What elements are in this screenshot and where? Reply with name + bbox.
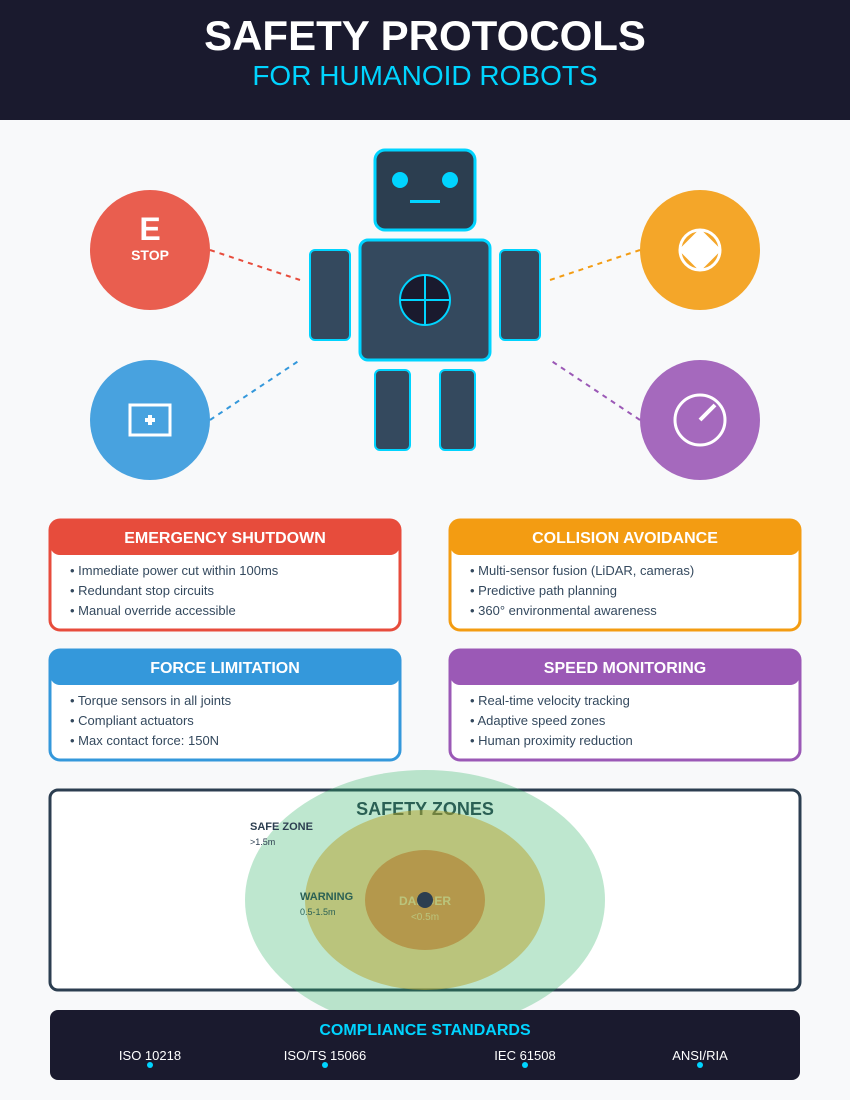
panel: force limitation: • Torque sensors in all joints bbox=[70, 693, 232, 708]
panel: force limitation: • Compliant actuators bbox=[70, 713, 194, 728]
label: warning: 0.5-1.5m bbox=[300, 907, 336, 917]
standard: ISO/TS 15066: ISO/TS 15066 bbox=[284, 1048, 366, 1063]
panel: speed monitoring: SPEED MONITORING bbox=[544, 660, 706, 677]
panel: safety zones bbox=[50, 770, 800, 1030]
icon: emergency stop bbox=[90, 190, 210, 310]
standard: IEC 61508: IEC 61508 bbox=[494, 1048, 556, 1063]
panel: force limitation bbox=[50, 650, 400, 760]
panel: speed monitoring: • Real-time velocity tracking bbox=[470, 693, 630, 708]
label: safe zone: SAFE ZONE bbox=[250, 821, 313, 833]
robot left leg bbox=[375, 370, 410, 450]
panel: collision avoidance: • 360° environmental awareness bbox=[470, 603, 657, 618]
panel: collision avoidance: • Multi-sensor fusion (LiDAR, cameras) bbox=[470, 563, 694, 578]
icon: force limitation bbox=[90, 360, 210, 480]
label: danger bbox=[399, 894, 451, 923]
icon: collision avoidance bbox=[640, 190, 760, 310]
panel: speed monitoring bbox=[450, 650, 800, 760]
robot figure bbox=[310, 150, 540, 450]
panel: collision avoidance: COLLISION AVOIDANCE bbox=[532, 530, 718, 547]
icon: emergency stop: E bbox=[139, 211, 161, 247]
icon: speed monitoring bbox=[640, 360, 760, 480]
panel: speed monitoring: • Human proximity reduction bbox=[470, 733, 633, 748]
robot position marker bbox=[417, 892, 433, 908]
title: SAFETY PROTOCOLS bbox=[204, 12, 646, 59]
connector: collision avoidance to robot bbox=[550, 250, 640, 280]
panel: emergency shutdown: • Immediate power cut within 100ms bbox=[70, 563, 279, 578]
robot right arm bbox=[500, 250, 540, 340]
zone: danger bbox=[365, 850, 485, 950]
zone: safe bbox=[245, 770, 605, 1030]
label: safe zone: >1.5m bbox=[250, 837, 275, 847]
standard: ANSI/RIA: ANSI/RIA bbox=[672, 1048, 728, 1063]
robot right leg bbox=[440, 370, 475, 450]
panel: emergency shutdown: • Manual override accessible bbox=[70, 603, 236, 618]
robot torso bbox=[360, 240, 490, 360]
robot head bbox=[375, 150, 475, 230]
heading: safety zones: SAFETY ZONES bbox=[356, 799, 494, 819]
standard: ISO 10218: ISO 10218 bbox=[119, 1048, 181, 1063]
panel: emergency shutdown bbox=[50, 520, 400, 630]
label: danger: <0.5m bbox=[411, 912, 439, 923]
panel: collision avoidance: • Predictive path planning bbox=[470, 583, 617, 598]
label: warning: WARNING bbox=[300, 891, 353, 903]
label: warning bbox=[300, 891, 353, 917]
panel: emergency shutdown: EMERGENCY SHUTDOWN bbox=[124, 530, 326, 547]
icon: emergency stop: STOP bbox=[131, 247, 169, 263]
panel: emergency shutdown: • Redundant stop circuits bbox=[70, 583, 215, 598]
panel: collision avoidance bbox=[450, 520, 800, 630]
panel: force limitation: FORCE LIMITATION bbox=[150, 660, 300, 677]
zone: warning bbox=[305, 810, 545, 990]
connector: emergency stop to robot bbox=[210, 250, 300, 280]
panel: force limitation: • Max contact force: 150N bbox=[70, 733, 219, 748]
panel: speed monitoring: • Adaptive speed zones bbox=[470, 713, 606, 728]
robot left arm bbox=[310, 250, 350, 340]
connector: speed monitoring to robot bbox=[550, 360, 640, 420]
header banner bbox=[0, 0, 850, 120]
label: danger: DANGER bbox=[399, 894, 451, 908]
connector: force limitation to robot bbox=[210, 360, 300, 420]
heading: compliance standards: COMPLIANCE STANDARDS bbox=[319, 1022, 531, 1039]
subtitle: FOR HUMANOID ROBOTS bbox=[252, 60, 598, 91]
panel: compliance standards bbox=[50, 1010, 800, 1080]
label: safe zone bbox=[250, 821, 313, 847]
